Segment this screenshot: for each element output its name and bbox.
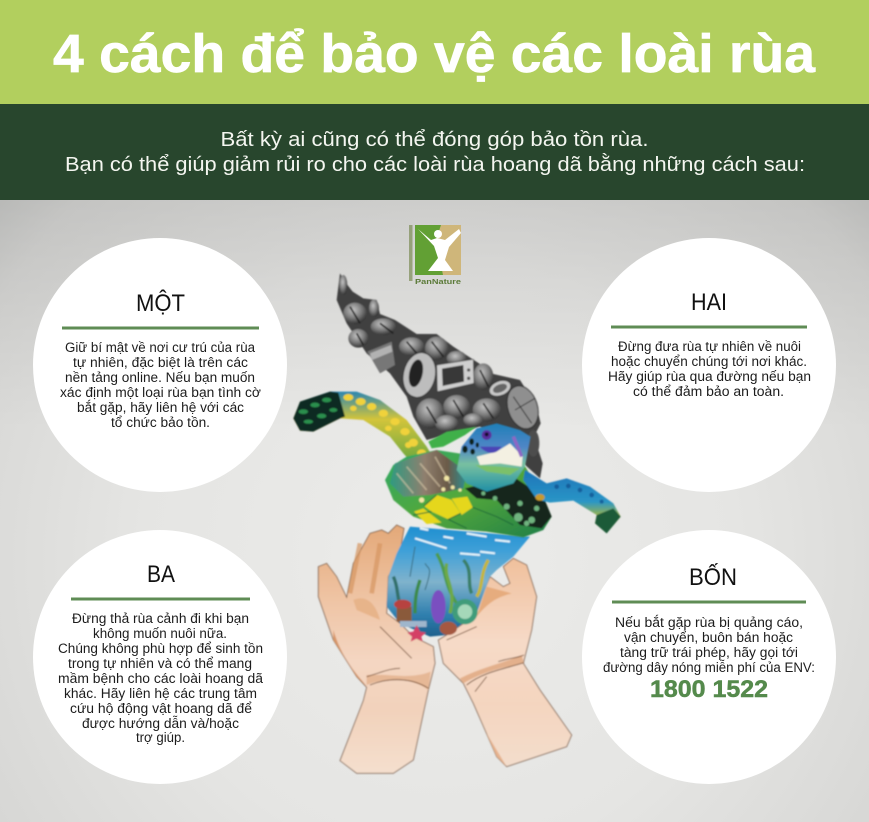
text: hai: có thể đảm bảo an toàn. bbox=[633, 384, 784, 399]
text: hai bbox=[608, 339, 811, 399]
text: một: xác định một loại rùa bạn tình cờ bbox=[60, 385, 261, 400]
text: bốn: đường dây nóng miễn phí của ENV: bbox=[603, 660, 815, 675]
text: ba bbox=[58, 611, 263, 745]
title band bbox=[0, 0, 869, 104]
text: một: bắt gặp, hãy liên hệ với các bbox=[77, 400, 244, 415]
shell bbox=[385, 450, 552, 537]
head bbox=[428, 423, 531, 492]
right flipper bbox=[523, 470, 621, 533]
intro text: Bạn có thể giúp giảm rủi ro cho các loài rùa hoang dã bằng những cách sau: bbox=[65, 153, 805, 176]
logo: PanNature: PanNature bbox=[415, 279, 461, 286]
garbage pile bbox=[337, 273, 543, 478]
intro text bbox=[65, 129, 805, 176]
logo: PanNature bbox=[409, 225, 461, 286]
heading: bốn: BỐN bbox=[689, 563, 737, 591]
heading: hai: HAI bbox=[691, 289, 727, 316]
panel: bốn bbox=[582, 530, 836, 784]
starfish bbox=[407, 625, 426, 642]
bin bbox=[487, 377, 543, 433]
text: bốn: Nếu bắt gặp rùa bị quảng cáo, bbox=[615, 615, 803, 630]
panel: một bbox=[33, 238, 287, 492]
text: hai: Đừng đưa rùa tự nhiên về nuôi bbox=[618, 339, 801, 354]
text: một: Giữ bí mật về nơi cư trú của rùa bbox=[65, 340, 255, 355]
illustration: hands, turtle and garbage bbox=[293, 273, 621, 773]
text: ba: khác. Hãy liên hệ các trung tâm bbox=[64, 686, 257, 701]
heading: một: MỘT bbox=[136, 289, 185, 317]
text: một: tổ chức bảo tồn. bbox=[111, 415, 210, 430]
text: ba: không muốn nuôi nữa. bbox=[93, 626, 227, 641]
text: ba: Đừng thả rùa cảnh đi khi bạn bbox=[72, 611, 249, 626]
intro text: Bất kỳ ai cũng có thể đóng góp bảo tồn rùa. bbox=[220, 129, 648, 151]
yellow scutes bbox=[414, 495, 473, 524]
text: bốn bbox=[603, 615, 815, 675]
text: bốn: vận chuyển, buôn bán hoặc bbox=[624, 630, 793, 645]
text: một bbox=[60, 340, 261, 430]
panel: hai bbox=[582, 238, 836, 492]
seaweed bbox=[393, 553, 488, 613]
left hand bbox=[318, 525, 435, 773]
water bag bbox=[387, 527, 530, 637]
right hand bbox=[438, 558, 572, 767]
text: ba: Chúng không phù hợp để sinh tồn bbox=[58, 641, 263, 656]
text: một: tự nhiên, đặc biệt là trên các bbox=[73, 355, 248, 370]
text: ba: cứu hộ động vật hoang dã để bbox=[70, 701, 252, 716]
background bbox=[0, 200, 869, 822]
intro band bbox=[0, 104, 869, 200]
text: ba: trợ giúp. bbox=[136, 730, 185, 745]
text: một: nền tảng online. Nếu bạn muốn bbox=[65, 370, 255, 385]
hands bbox=[318, 525, 572, 773]
text: hai: hoặc chuyển chúng tới nơi khác. bbox=[611, 354, 807, 369]
left flipper bbox=[293, 392, 437, 483]
microwave bbox=[437, 359, 474, 392]
turtle bbox=[293, 392, 621, 537]
text: ba: trong tự nhiên và có thể mang bbox=[68, 656, 252, 671]
title: 4 cách để bảo vệ các loài rùa bbox=[53, 24, 816, 84]
heading: ba: BA bbox=[147, 561, 175, 588]
panel: ba bbox=[33, 530, 287, 784]
tyre bbox=[399, 350, 440, 400]
text: ba: được hướng dẫn và/hoặc bbox=[82, 716, 239, 731]
text: bốn: tàng trữ trái phép, hãy gọi tới bbox=[620, 645, 798, 660]
text: hai: Hãy giúp rùa qua đường nếu bạn bbox=[608, 369, 811, 384]
hotline number: 1800 1522 bbox=[650, 676, 768, 703]
text: ba: mầm bệnh cho các loài hoang dã bbox=[58, 671, 263, 686]
